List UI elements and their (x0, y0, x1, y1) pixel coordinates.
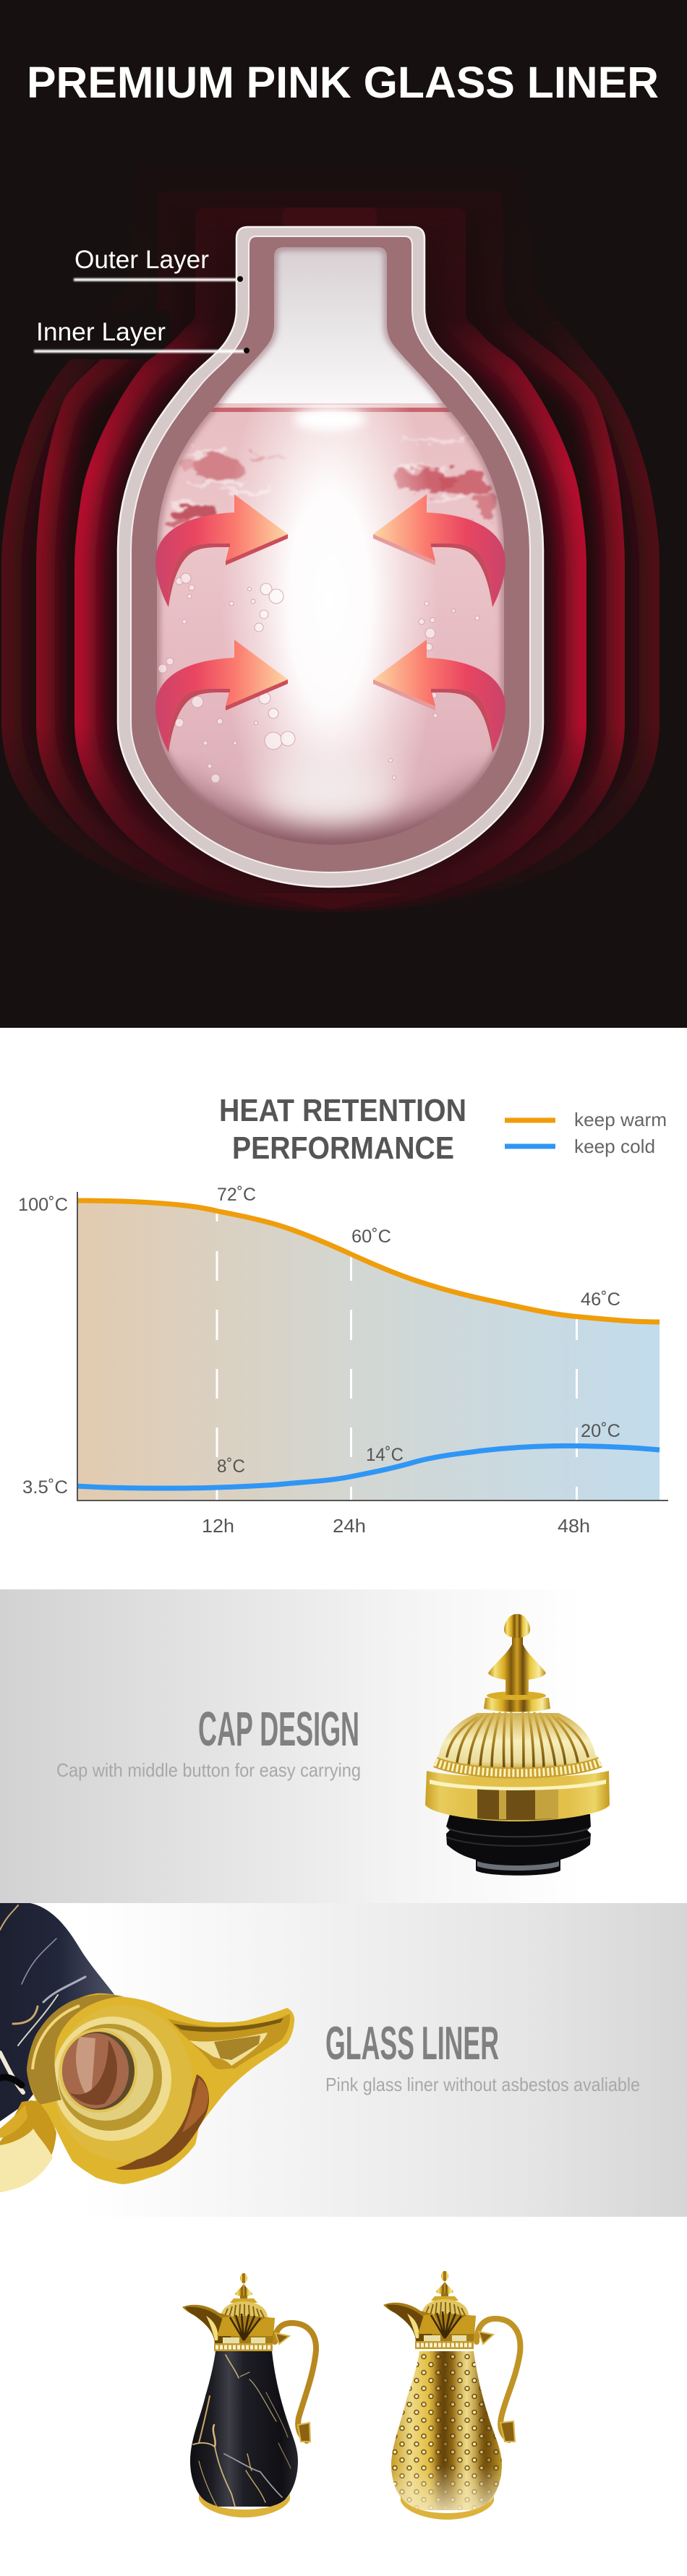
finial (488, 1637, 546, 1695)
legend: keep warm (574, 1109, 667, 1130)
callout: outer layer (74, 246, 243, 282)
outer layer shell (118, 227, 543, 887)
callout: outer layer: Outer Layer (74, 246, 209, 274)
legend: keep cold (574, 1135, 655, 1157)
chart heading (219, 1093, 466, 1166)
value labels: 46˚C (581, 1289, 620, 1310)
dome (434, 1713, 602, 1774)
water swirls (166, 439, 496, 529)
body (391, 2351, 502, 2510)
chart plot (18, 1185, 668, 1537)
heat glow layers (0, 166, 660, 912)
water bubbles (158, 573, 479, 783)
value labels: 20˚C (581, 1421, 620, 1441)
value labels: 3.5˚C (22, 1477, 68, 1498)
panel: heat retention chart (18, 1093, 668, 1537)
callout: inner layer: Inner Layer (36, 318, 166, 346)
black marble body (0, 1903, 117, 2121)
marble veins (0, 1905, 85, 2092)
marble veins (193, 2355, 291, 2507)
panel: glass liner (0, 1903, 687, 2217)
spout reflections (168, 2014, 290, 2069)
handle fragment (0, 2100, 56, 2192)
handle (477, 2319, 520, 2440)
axes (77, 1192, 668, 1500)
hammered dimples (391, 2351, 502, 2510)
value labels: 8˚C (217, 1456, 245, 1477)
time axis labels: 12h (202, 1515, 234, 1537)
lid (182, 2273, 275, 2351)
arrow: lower right (373, 640, 505, 752)
keep warm curve (77, 1201, 660, 1322)
panel background (0, 0, 687, 1028)
icon: gold cap (425, 1614, 610, 1876)
lower highlight (391, 2351, 502, 2510)
diagram: double-wall bottle (118, 227, 543, 887)
keep cold curve (77, 1446, 660, 1488)
heading: GLASS LINER (325, 2017, 499, 2069)
copper liner glimpse (116, 2074, 209, 2170)
neck ring (27, 1995, 123, 2105)
gold base ring (401, 2496, 494, 2520)
pink glass liner window (59, 2029, 137, 2113)
description: Cap with middle button for easy carrying (56, 1759, 361, 1781)
heading: PREMIUM PINK GLASS LINER (27, 58, 659, 107)
time axis labels: 24h (333, 1515, 366, 1537)
rope band (435, 1762, 600, 1773)
legend (505, 1109, 667, 1157)
panel: cap design (0, 1589, 687, 1903)
skirt band (425, 1771, 610, 1821)
panel background (0, 1589, 687, 1903)
panel background (0, 1903, 687, 2217)
time axis labels (202, 1515, 590, 1537)
reflective bands (391, 2351, 502, 2510)
jug: black marble (182, 2273, 316, 2517)
panel: product jugs (182, 2271, 520, 2520)
handle (275, 2323, 316, 2441)
time axis labels: 48h (558, 1515, 590, 1537)
jug: hammered gold (383, 2271, 520, 2520)
lid (383, 2271, 476, 2349)
arrow: upper left (155, 494, 288, 607)
value labels: 72˚C (217, 1185, 256, 1205)
body (190, 2351, 298, 2507)
value labels (18, 1185, 620, 1498)
grid dashes (217, 1208, 577, 1500)
arrow: lower left (155, 640, 288, 752)
gold base ring (199, 2494, 290, 2517)
inner edge shading (157, 247, 504, 845)
heading: CAP DESIGN (198, 1702, 359, 1756)
value labels: 14˚C (366, 1445, 404, 1465)
lid disc (54, 2005, 192, 2161)
collar (484, 1698, 550, 1712)
chart heading: PERFORMANCE (232, 1130, 454, 1166)
inner glass liner contents (148, 242, 513, 853)
icon: jug spout close-up (0, 1903, 294, 2192)
chart heading: HEAT RETENTION (219, 1093, 466, 1128)
description: Pink glass liner without asbestos avaliable (325, 2074, 640, 2095)
area fill (77, 1201, 660, 1500)
arrow: upper right (373, 494, 505, 607)
vacuum gap wall (131, 236, 530, 872)
black threaded plug (446, 1814, 591, 1876)
value labels: 100˚C (18, 1195, 68, 1215)
panel: premium pink glass liner (0, 0, 687, 1028)
central light column (232, 405, 427, 828)
callout: inner layer (34, 318, 249, 353)
dome flutes (447, 1713, 588, 1770)
value labels: 60˚C (351, 1227, 391, 1247)
gold spout (27, 1993, 294, 2184)
